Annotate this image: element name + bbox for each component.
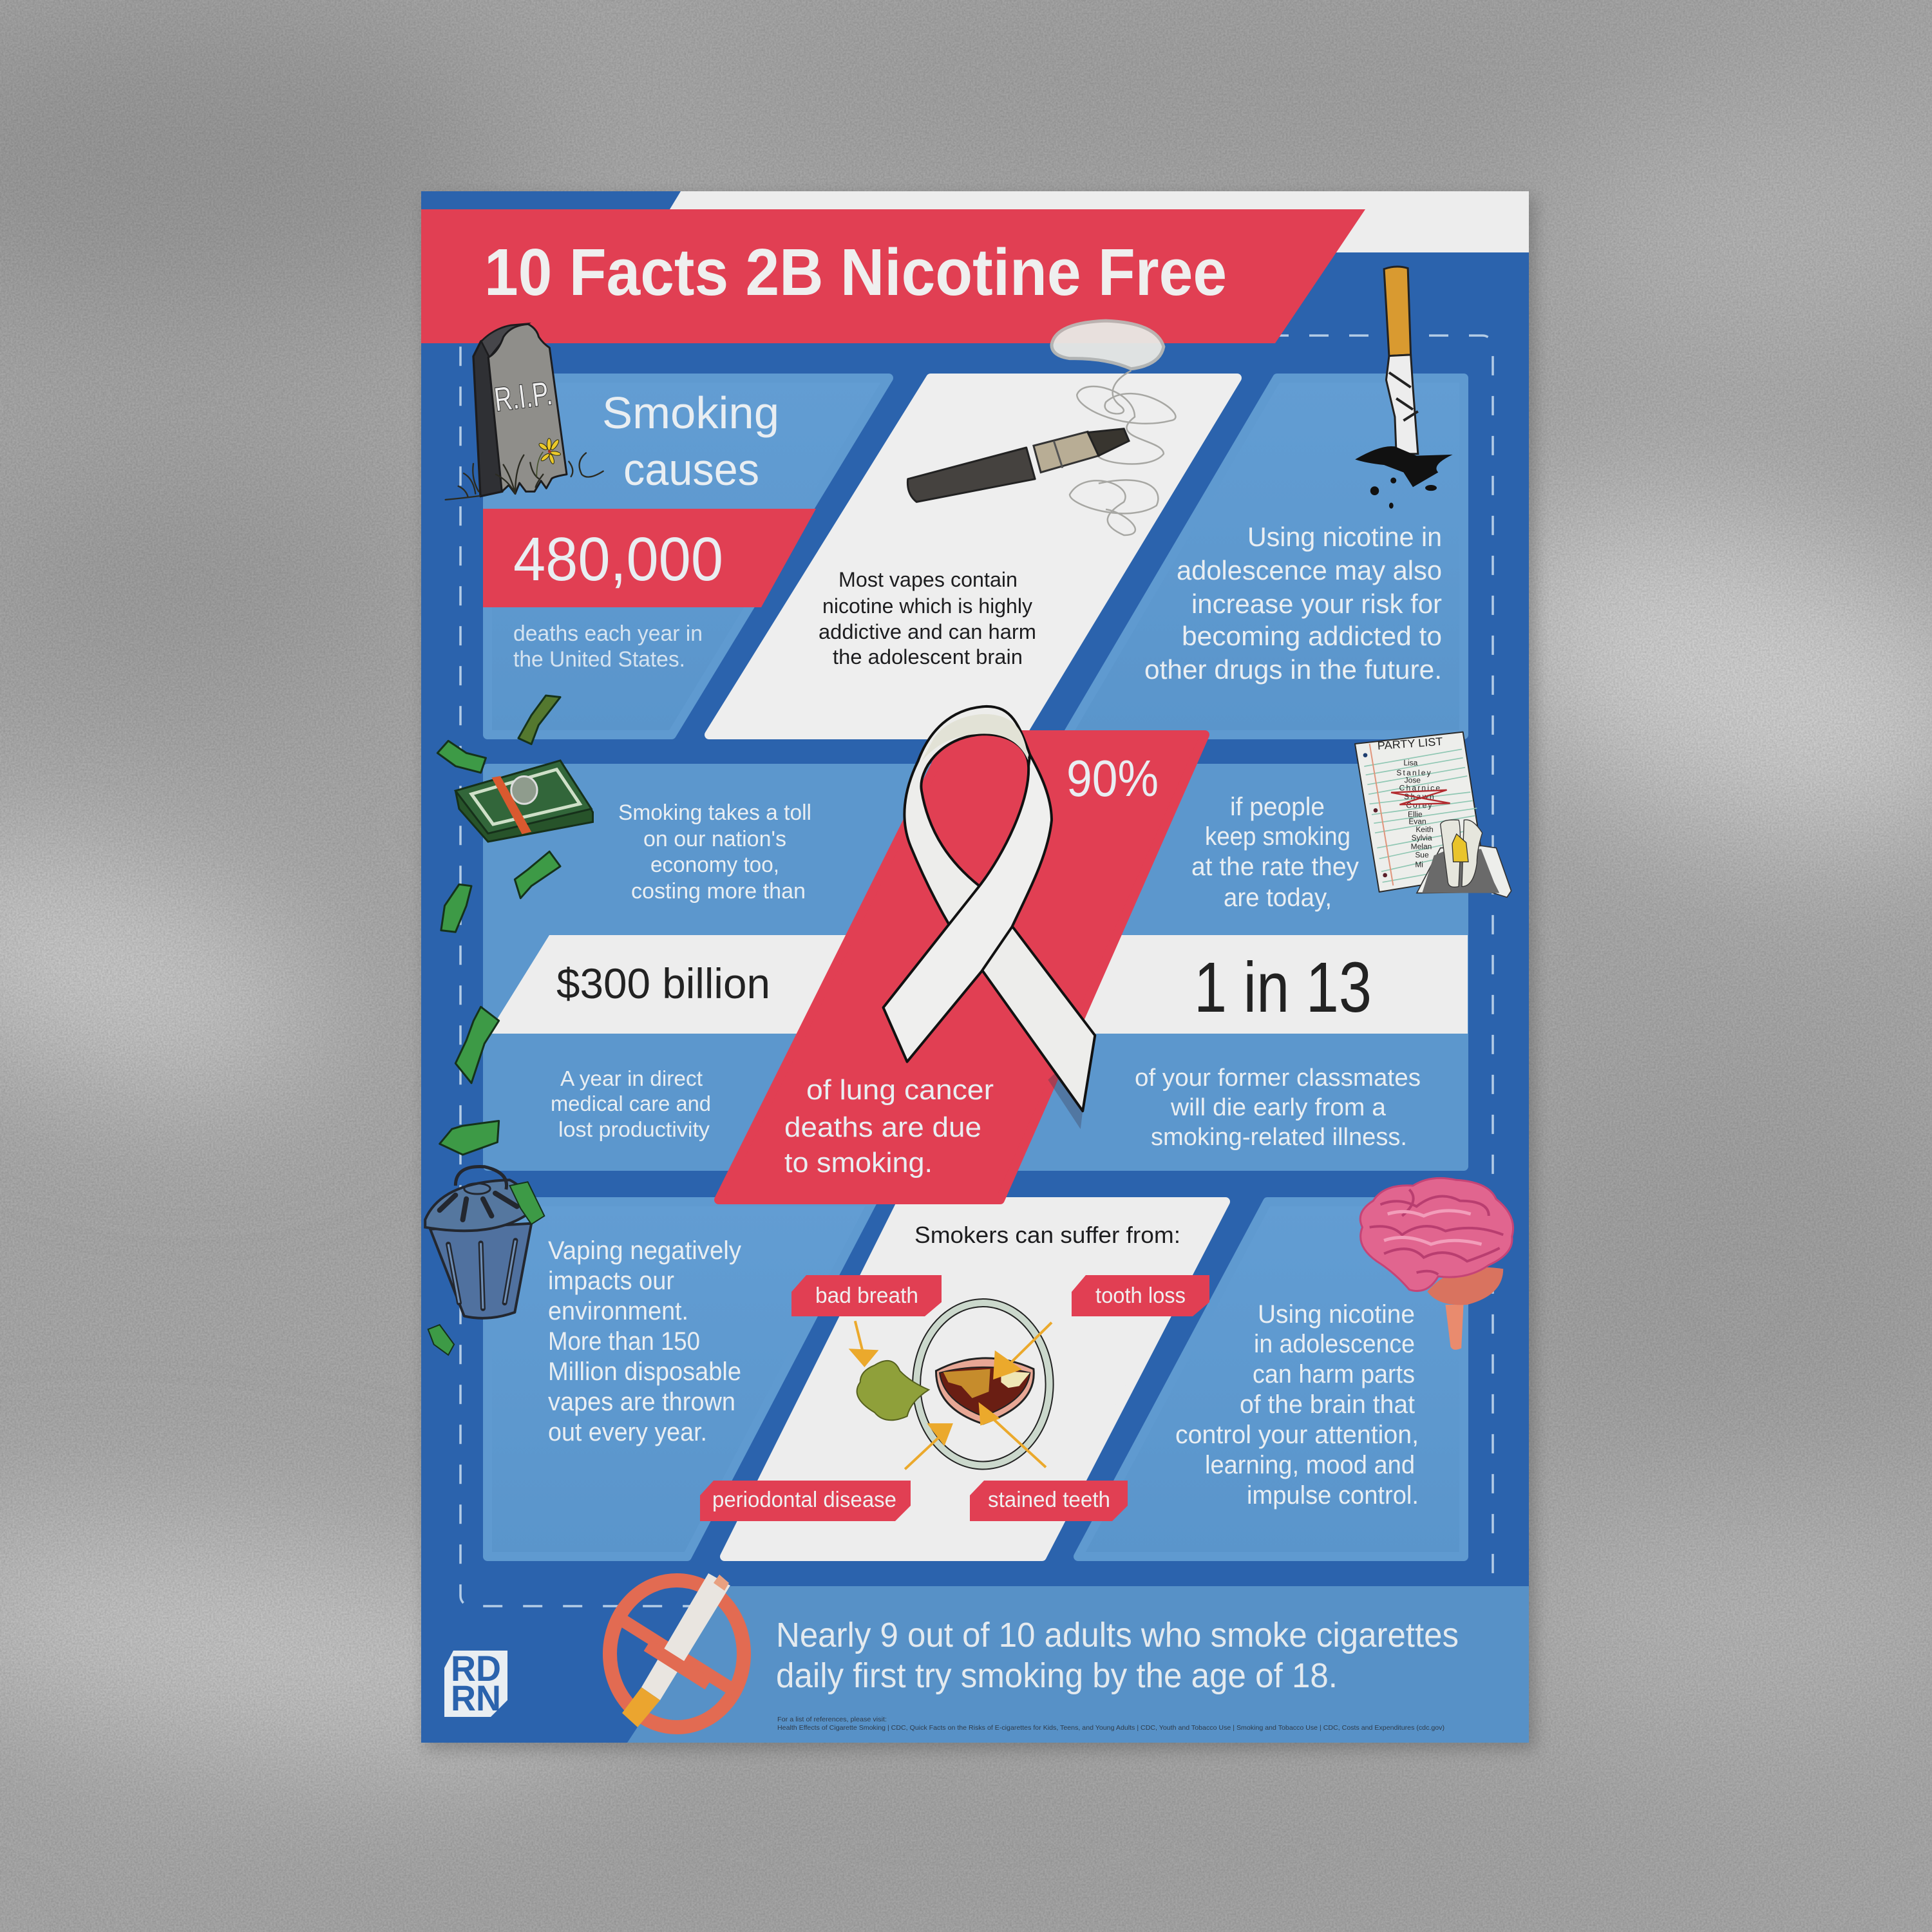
text: brain: of the brain that [1240, 1390, 1415, 1419]
logo: RDRN [444, 1648, 507, 1718]
text: economy: economy too, [650, 853, 779, 877]
icon: party list and toes: Lisa [1403, 758, 1418, 767]
ribbon back strand [904, 706, 1095, 1111]
icon: brain [1360, 1178, 1513, 1350]
panel: lung cancer red [719, 735, 1205, 1200]
text: first try by 18: Nearly 9 out of 10 adults who smoke cigarettes [776, 1616, 1459, 1654]
icon: party list and toes: Shawn [1404, 792, 1434, 801]
label: tooth loss [1072, 1275, 1209, 1316]
title: 10 Facts 2B Nicotine Free [484, 235, 1227, 309]
stat: 480,000: 480,000 [513, 525, 723, 594]
flying bills [437, 696, 560, 1155]
text: vaping environment: Million disposable [548, 1358, 741, 1386]
stat: 300 billion: $300 billion [556, 960, 770, 1007]
white top corner strip [670, 191, 1529, 252]
icon: vape pen [907, 429, 1129, 502]
mouth [936, 1358, 1034, 1424]
icon: tombstone: R.I.P. [492, 374, 554, 418]
text: classmates: will die early from a [1170, 1094, 1387, 1121]
label: tooth loss: tooth loss [1095, 1283, 1186, 1308]
logo: RDRN: RN [451, 1678, 501, 1718]
text: brain: Using nicotine [1258, 1300, 1415, 1329]
text: other drugs: other drugs in the future. [1144, 654, 1442, 685]
text: lung cancer: of lung cancer [806, 1074, 994, 1106]
text: brain: learning, mood and [1205, 1451, 1415, 1479]
icon: party list and toes: Stanley [1396, 768, 1431, 777]
text: vapes: the adolescent brain [833, 645, 1023, 668]
text: brain: can harm parts [1253, 1360, 1415, 1388]
icon: party list and toes: PARTY LIST [1377, 735, 1443, 752]
panel: brain text [1078, 1202, 1464, 1557]
icon: white ribbon [884, 706, 1095, 1129]
red 480,000 band [483, 509, 816, 607]
text: brain [1175, 1300, 1419, 1510]
references [777, 1716, 1444, 1732]
text: lung cancer [784, 1074, 994, 1179]
yellow arrows [851, 1321, 1052, 1469]
icon: stubbed cigarette [1355, 267, 1453, 509]
poster background blue [421, 191, 1529, 1743]
references: For a list of references, please visit: [777, 1716, 887, 1723]
icon: party list and toes: Jose [1405, 776, 1421, 785]
sheet and feet [1417, 846, 1511, 897]
white band: 1 in 13 [1030, 935, 1468, 1034]
ribbon shadow [1048, 1036, 1095, 1129]
text: medical care: lost productivity [558, 1117, 710, 1141]
green cloud [857, 1361, 929, 1420]
text: medical care: medical care and [551, 1092, 711, 1115]
logo: RDRN: RD [451, 1648, 501, 1689]
text: if people: are today, [1224, 884, 1332, 912]
dashed border line [460, 336, 1493, 1606]
text: first try by 18: daily first try smoking by the age of 18. [776, 1656, 1338, 1695]
white band: 300 billion [488, 935, 902, 1034]
text: economy: Smoking takes a toll [618, 800, 811, 825]
label: periodontal disease [700, 1481, 911, 1521]
icon: party list and toes: Sue [1415, 851, 1429, 860]
panel: vapes contain nicotine [709, 378, 1237, 735]
text: economy [618, 800, 811, 904]
text: deaths each year: the United States. [513, 647, 685, 672]
stat: 90%: 90% [1066, 750, 1159, 807]
label: periodontal disease: periodontal disease [712, 1488, 896, 1512]
icon: party list and toes: Keith [1416, 825, 1434, 834]
heading: smoking causes [602, 388, 779, 495]
text: medical care: A year in direct [560, 1066, 703, 1090]
icon: party list and toes: Evan [1408, 817, 1426, 826]
text: deaths each year: deaths each year in [513, 621, 703, 646]
icon: trash can [425, 1166, 544, 1355]
icon: party list and toes: Charnice [1399, 784, 1440, 793]
stat: 1 in 13: 1 in 13 [1194, 948, 1372, 1027]
panel: other drugs [1067, 378, 1464, 735]
text: if people: at the rate they [1191, 853, 1359, 881]
text: if people: if people [1230, 793, 1325, 821]
text: other drugs [1144, 522, 1442, 685]
icon: no smoking [610, 1573, 744, 1727]
text: brain: control your attention, [1175, 1421, 1419, 1449]
heading: smoking causes: Smoking [602, 388, 779, 438]
title banner [421, 209, 1365, 343]
panel: smokers suffer [724, 1202, 1226, 1557]
text: vapes: addictive and can harm [819, 620, 1036, 643]
heading: smokers can suffer: Smokers can suffer from: [914, 1222, 1180, 1248]
text: vaping environment: More than 150 [548, 1327, 700, 1356]
text: if people: keep smoking [1205, 822, 1350, 851]
icon: party list and toes: Melan [1411, 842, 1432, 851]
text: vaping environment: vapes are thrown [548, 1388, 735, 1416]
text: if people [1191, 793, 1359, 912]
heading: smoking causes: causes [623, 444, 759, 495]
text: other drugs: becoming addicted to [1182, 621, 1442, 651]
label: stained teeth [970, 1481, 1128, 1521]
panel: environment [488, 1202, 873, 1557]
text: vaping environment: Vaping negatively [548, 1236, 741, 1265]
icon: money stack [455, 761, 592, 842]
panel: smoking deaths [483, 378, 889, 735]
text: other drugs: Using nicotine in [1247, 522, 1442, 552]
label: bad breath [791, 1275, 942, 1316]
poster [421, 191, 1529, 1743]
icon: party list and toes: Sylvia [1412, 833, 1432, 842]
text: vapes: nicotine which is highly [822, 594, 1032, 618]
text: deaths each year [513, 621, 703, 672]
text: first try by 18 [776, 1616, 1459, 1695]
text: brain: in adolescence [1254, 1330, 1415, 1358]
icon: party list and toes: Mi [1415, 860, 1423, 869]
icon: tombstone [446, 324, 603, 500]
text: classmates: smoking-related illness. [1151, 1124, 1407, 1151]
text: classmates [1135, 1065, 1421, 1151]
text: economy: costing more than [631, 879, 806, 904]
poster shadow [425, 196, 1535, 1750]
text: other drugs: increase your risk for [1191, 589, 1442, 619]
icon: party list and toes: Ellie [1408, 810, 1423, 819]
paper [1355, 732, 1481, 892]
text: lung cancer: deaths are due [784, 1112, 981, 1143]
icon: vape smoke [1052, 321, 1175, 535]
text: vapes [819, 568, 1036, 668]
icon: party list and toes [1355, 732, 1511, 897]
text: other drugs: adolescence may also [1177, 555, 1442, 585]
text: vaping environment: environment. [548, 1297, 688, 1325]
text: vaping environment [548, 1236, 741, 1446]
text: brain: impulse control. [1247, 1481, 1419, 1510]
text: lung cancer: to smoking. [784, 1147, 933, 1179]
panel: middle row [488, 768, 1468, 1166]
icon: party list and toes: Corey [1406, 800, 1432, 810]
icon: mouth diagram [851, 1303, 1052, 1469]
text: classmates: of your former classmates [1135, 1065, 1421, 1092]
panel: footer [627, 1586, 1529, 1743]
text: vaping environment: out every year. [548, 1418, 707, 1446]
text: medical care [551, 1066, 711, 1141]
label: stained teeth: stained teeth [988, 1488, 1110, 1512]
references: Health Effects of Cigarette Smoking | CDC, Quick Facts on the Risks of E-cigarettes for Kids, Teens, and Young Adults | CDC, Youth and Tobacco Use | Smoking and Tobacco Use | CDC, Costs and Expenditures (cdc.gov) [777, 1724, 1444, 1732]
text: vapes: Most vapes contain [838, 568, 1018, 591]
text: economy: on our nation's [643, 827, 786, 851]
ribbon front strand [884, 755, 1052, 1062]
label: bad breath: bad breath [815, 1283, 918, 1308]
text: vaping environment: impacts our [548, 1267, 674, 1295]
